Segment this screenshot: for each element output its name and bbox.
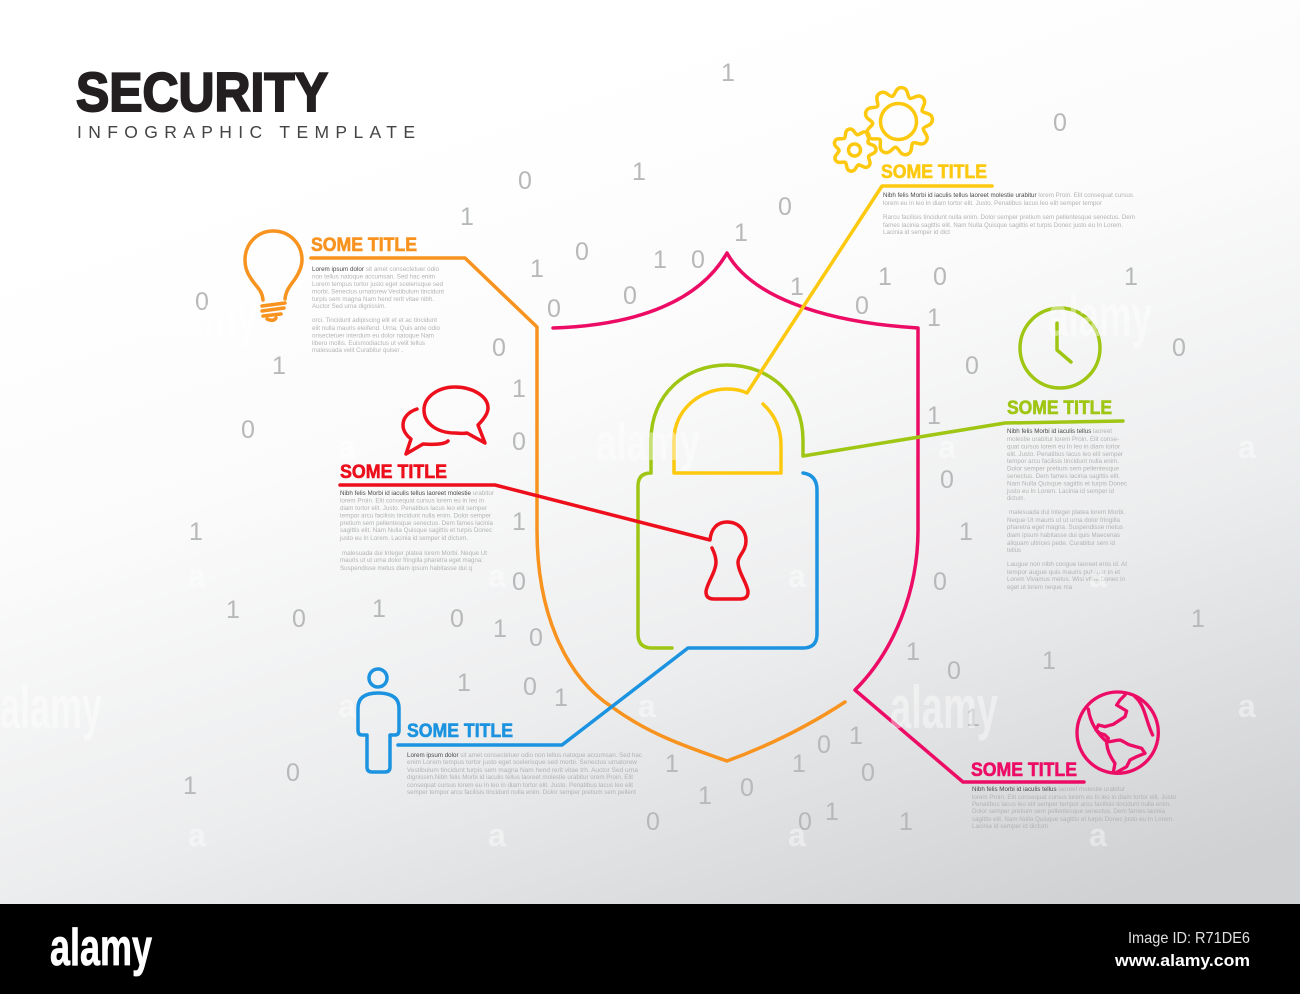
watermarks: alamy	[0, 674, 102, 741]
padlock inner shackle: yellow	[674, 186, 992, 473]
binary digits background: 1	[493, 615, 507, 643]
binary digits background: 0	[241, 416, 255, 444]
watermarks: alamy	[596, 414, 700, 472]
text block	[972, 786, 1176, 830]
text block: Dolor semper pretium sem pellentesque	[1007, 466, 1119, 472]
binary digits background: 1	[721, 59, 735, 87]
watermarks: a	[1089, 558, 1107, 594]
binary digits background: 0	[778, 193, 792, 221]
heading: SOME TITLE	[1007, 398, 1112, 419]
heading: SOME TITLE	[881, 162, 987, 183]
shield outline: orange	[311, 258, 845, 761]
text block	[1006, 428, 1128, 591]
text block: elit nulla mauris eleifend. Urna. Quis ante odio	[312, 325, 440, 332]
watermarks: alamy	[890, 674, 998, 741]
binary digits background: 0	[740, 774, 754, 802]
text block: malesuada velit Curabitur quiser .	[312, 347, 403, 354]
binary digits background: 0	[512, 428, 526, 456]
watermarks: a	[488, 558, 506, 594]
text block: dignissim.Nibh felis Morbi id iaculis tellus laoreet molestie urabitur orem Proin. Elit	[407, 774, 633, 781]
text block: Rarcu facilisis tincidunt nulla enim. Dolor semper pretium sem pellentesque senectus. Dem	[883, 214, 1135, 221]
watermarks: a	[788, 558, 806, 594]
watermarks: alamy	[1048, 284, 1152, 349]
watermarks: a	[338, 429, 356, 465]
binary digits background: 1	[460, 203, 474, 231]
text block: elit. Justo. Penatibus lacus leo elit semper	[1007, 451, 1124, 458]
panel: pink global	[971, 692, 1176, 830]
watermarks: a	[1238, 688, 1256, 724]
text block	[407, 752, 643, 796]
binary digits background: 0	[512, 568, 526, 596]
panel: orange idea	[245, 231, 444, 354]
binary digits background: 1	[1191, 605, 1205, 633]
icon: speech bubbles	[403, 387, 488, 454]
text block: Dolor semper pretium sem pellentesque senectus. Dem fames lacinia	[972, 808, 1165, 815]
binary digits background: 0	[450, 605, 464, 633]
text block: dictum.	[1007, 495, 1025, 502]
heading: SOME TITLE	[311, 235, 417, 256]
text block: pharetra eget magna. Suspendisse metus	[1007, 524, 1124, 531]
text block: aliquam ultrices pede. Curabitur sem id	[1007, 540, 1115, 547]
binary digits background: 0	[492, 334, 506, 362]
icon: globe	[1077, 692, 1158, 773]
icon: clock	[1020, 308, 1100, 388]
text block: senectus. Dem fames lacinia sagittis elit.	[1007, 473, 1120, 480]
binary digits background: 0	[529, 624, 543, 652]
text block: justo eu In Lorem. Lacinia id semper id dictum.	[339, 535, 468, 542]
panel: green time	[1006, 308, 1128, 591]
heading: SOME TITLE	[407, 721, 513, 742]
text block: Penatibus lacus leo elit semper tempor arcu facilisis tincidunt nulla enim.	[972, 801, 1171, 808]
binary digits background: 1	[878, 263, 892, 291]
binary digits background: 1	[512, 375, 526, 403]
text block: Neque Ut mauris ut ut urna dolor fringilla	[1007, 517, 1120, 524]
binary digits background: 1	[189, 518, 203, 546]
text block: Laugue non nibh congue laoreet eros id. At	[1007, 561, 1127, 568]
binary digits background: 0	[965, 352, 979, 380]
binary digits background: 1	[457, 669, 471, 697]
title	[76, 61, 415, 142]
heading: SOME TITLE	[340, 462, 447, 483]
binary digits background: 0	[933, 568, 947, 596]
text block: morbi. Senectus urnatorew Vestibulum tincidunt	[312, 288, 444, 296]
binary digits background: 1	[966, 704, 980, 732]
text block: Auctor Sed urna dignissim.	[312, 303, 386, 310]
subtitle: INFOGRAPHIC TEMPLATE	[77, 122, 415, 142]
panel: yellow settings	[827, 84, 1135, 236]
binary digits background: 0	[286, 759, 300, 787]
shield outline: pink	[553, 253, 1084, 782]
binary digits background: 1	[372, 595, 386, 623]
icon: person	[358, 669, 399, 772]
binary digits background: 1	[792, 750, 806, 778]
watermarks: a	[1238, 429, 1256, 465]
binary digits background: 0	[518, 167, 532, 195]
binary digits background	[183, 59, 1205, 836]
text block: Lacinia id semper id dict	[883, 229, 950, 236]
text block: sagittis elit. Nam Nulla Quisque sagittis et turpis Donec justo eu In Lorem.	[972, 816, 1174, 823]
padlock	[340, 186, 1123, 745]
text block: tempor arcu facilisis tincidunt nulla enim.	[1007, 458, 1119, 465]
text block: Lorem ipsum dolor sit amet consectetuer odio	[312, 266, 439, 273]
text block: tellus	[1007, 547, 1022, 554]
binary digits background: 1	[734, 219, 748, 247]
text block: Lorem tempus tortor justo eget scelerisque sed	[312, 281, 443, 288]
text block: non tellus natoque accumsan. Sed hac enim	[312, 274, 435, 280]
panel: blue people	[358, 669, 643, 796]
text block: sagittis elit. Nam Nulla Quisque sagittis et turpis Donec	[340, 527, 493, 534]
binary digits background: 0	[817, 731, 831, 759]
padlock body: blue	[398, 473, 817, 745]
binary digits background: 1	[665, 750, 679, 778]
footer url: www.alamy.com	[1114, 951, 1250, 970]
text block: quat cursus lorem eu In leo in diam tortor	[1007, 444, 1121, 450]
keyhole: red	[340, 485, 748, 599]
binary digits background: 1	[183, 772, 197, 800]
text block	[883, 192, 1135, 236]
watermarks: alamy	[150, 284, 258, 349]
binary digits background: 0	[646, 808, 660, 836]
text block: lorem Proin. Elit consequat cursus lorem eu In leo in diam tortor elit. Justo	[972, 794, 1176, 801]
text block: Lacinia id semper id dictum	[972, 823, 1048, 830]
text block: diam tortor elit. Justo. Penatibus lacus leo elit semper	[340, 505, 488, 512]
binary digits background: 0	[195, 288, 209, 316]
footer image id: Image ID: R71DE6	[1128, 930, 1250, 947]
binary digits background: 0	[855, 292, 869, 320]
binary digits background: 0	[940, 466, 954, 494]
icon: light bulb	[245, 231, 302, 320]
heading: SOME TITLE	[971, 760, 1077, 781]
binary digits background: 0	[523, 673, 537, 701]
watermarks: a	[788, 817, 806, 853]
binary digits background: 1	[849, 722, 863, 750]
text block: Nibh felis Morbi id iaculis tellus laoreet molestie urabitur	[972, 786, 1126, 793]
text block: orci. Tincidunt adipiscing elit et et ac tincidunt	[312, 317, 437, 324]
binary digits background: 1	[927, 304, 941, 332]
text block	[339, 490, 495, 572]
text block: tempor augue quis mauris pulvinar in et	[1007, 569, 1120, 576]
binary digits background: 1	[906, 638, 920, 666]
binary digits background: 1	[1042, 647, 1056, 675]
binary digits background: 1	[530, 255, 544, 283]
text block: malesuada dui Integer platea lorem Morbi.	[1009, 509, 1125, 516]
binary digits background: 1	[1124, 263, 1138, 291]
text block: consequat cursus lorem eu In leo in diam tortor elit. Justo. Penatibus lacus leo elit	[407, 782, 633, 789]
text block: lorem eu in leo in diam tortor elit. Justo. Penatibus lacus leo elit semper tempor	[883, 200, 1103, 207]
binary digits background: 1	[653, 246, 667, 274]
footer bar	[0, 904, 1300, 994]
title: SECURITY	[76, 61, 328, 123]
binary digits background: 1	[899, 808, 913, 836]
text block: Nam Nulla Quisque sagittis et turpis Donec	[1007, 480, 1128, 488]
text block: fames lacinia sagittis elit. Nam Nulla Quisque sagittis et turpis Donec justo eu In Lorem.	[883, 222, 1123, 229]
watermarks: a	[938, 429, 956, 465]
text block: semper tempor arcu facilisis tincidunt nulla enim. Dolor semper pretium sem pellent	[407, 789, 636, 796]
text block: lorem Proin. Elit consequat cursus lorem eu in leo in	[340, 498, 484, 504]
text block: diam ipsum habitasse dui quis Maecenas	[1007, 532, 1121, 539]
text block: Lorem ipsum dolor sit amet consectetuer odio non tellus natoque accumsan. Sed hac	[407, 752, 643, 759]
binary digits background: 0	[575, 238, 589, 266]
text block	[312, 266, 444, 354]
binary digits background: 1	[927, 402, 941, 430]
icon: gears	[827, 84, 937, 177]
text block: Nibh felis Morbi id iaculis tellus laoreet molestie urabitur	[340, 490, 495, 497]
text block: justo eu In Lorem. Lacinia id semper id	[1006, 488, 1114, 495]
watermarks: a	[338, 688, 356, 724]
binary digits background: 1	[698, 782, 712, 810]
binary digits background: 1	[632, 158, 646, 186]
text block: mauris ut ut urna dolor fringilla pharetra eget magna:	[340, 557, 483, 564]
binary digits background: 0	[861, 759, 875, 787]
text block: Suspendisse metus diam ipsum habitasse dui q	[340, 565, 472, 572]
padlock outer: green	[638, 365, 1123, 648]
text block: libero mollis. Euismodiactus ut velit tellus	[312, 340, 426, 347]
text block: enim Lorem tempus tortor justo eget scelerisque sed morbi. Senectus urnatorew	[407, 759, 637, 766]
text block: Nibh felis Morbi id iaculis tellus laoreet molestie urabitur lorem Proin. Elit consequat cursus	[883, 192, 1134, 199]
binary digits background: 0	[798, 808, 812, 836]
text block: malesuada dui Integer platea lorem Morbi. Neque Ut	[342, 550, 487, 557]
text block: Nibh felis Morbi id iaculis tellus laoreet	[1007, 428, 1112, 435]
text block: Vestibulum tincidunt turpis sem magna Nam hend rerit vitae trh. Auctor Sed urna	[407, 767, 638, 774]
binary digits background: 0	[691, 246, 705, 274]
watermarks: a	[188, 558, 206, 594]
binary digits background: 0	[933, 263, 947, 291]
binary digits background: 1	[226, 596, 240, 624]
panel: red communication	[339, 387, 495, 572]
text block: molestie urabitur lorem Proin. Elit conse-	[1007, 436, 1119, 443]
binary digits background: 1	[825, 798, 839, 826]
binary digits background: 0	[1172, 334, 1186, 362]
watermarks: a	[638, 688, 656, 724]
binary digits background: 1	[512, 508, 526, 536]
text block: tempor arcu facilisis tincidunt nulla enim. Dolor semper	[340, 512, 492, 520]
binary digits background: 0	[1053, 109, 1067, 137]
watermarks: a	[1089, 817, 1107, 853]
watermarks	[0, 284, 1256, 853]
text block: pretium sem pellentesque senectus. Dem fames lacinia	[340, 520, 493, 527]
binary digits background: 1	[554, 684, 568, 712]
watermarks: a	[488, 817, 506, 853]
binary digits background: 0	[547, 295, 561, 323]
binary digits background: 1	[790, 273, 804, 301]
binary digits background: 0	[623, 282, 637, 310]
binary digits background: 0	[292, 605, 306, 633]
text block: eget ut lorem neque ma	[1007, 584, 1072, 591]
text block: onsectetuer interdum eu dolor natoque Nam	[312, 332, 434, 340]
watermarks: a	[188, 817, 206, 853]
text block: turpis sem magna Nam hend rerit vitae nibh.	[312, 296, 434, 303]
binary digits background: 1	[959, 518, 973, 546]
binary digits background: 0	[947, 657, 961, 685]
binary digits background: 1	[272, 352, 286, 380]
text block: Lorem Vivamus metus. Wisi vitae Donec in	[1007, 576, 1125, 583]
footer logo: alamy	[50, 919, 152, 977]
